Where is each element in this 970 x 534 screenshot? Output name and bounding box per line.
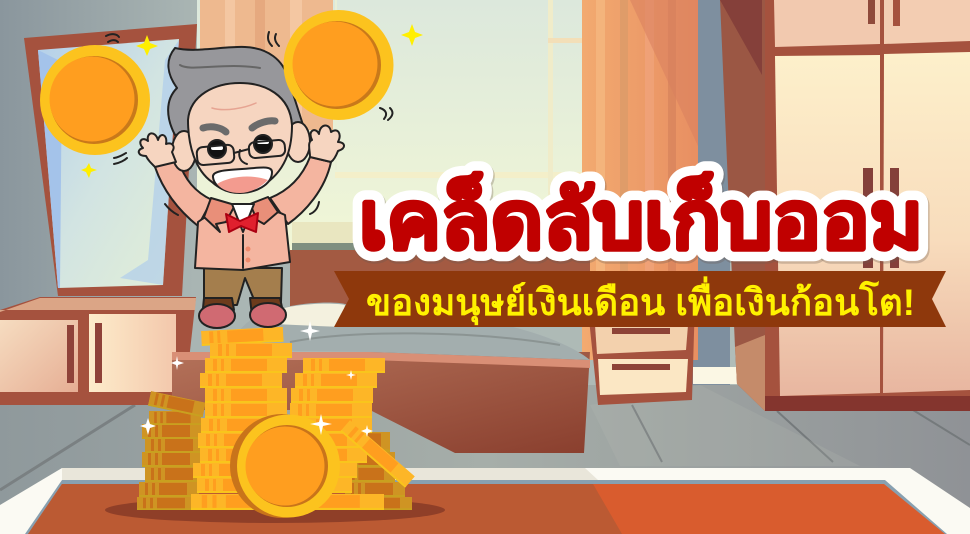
collar (204, 198, 235, 232)
glasses (196, 139, 286, 166)
tilted coin (340, 420, 415, 488)
bedside table (587, 300, 695, 405)
shadow under coins (105, 497, 445, 523)
right curtain (582, 0, 698, 360)
subtitle: ของมนุษย์เงินเดือน เพื่อเงินก้อนโต! (366, 276, 915, 326)
right stack (270, 358, 385, 510)
left hand (139, 133, 176, 167)
front big coin (230, 414, 340, 518)
bed (172, 303, 590, 453)
pants (204, 268, 282, 305)
white sparkles (140, 321, 373, 437)
window light on floor (693, 367, 737, 384)
floating coin right (284, 10, 394, 120)
jacket (195, 207, 290, 270)
main stack (191, 327, 301, 510)
window (197, 0, 585, 255)
rug (0, 468, 970, 534)
mouth (213, 168, 272, 193)
right hand (309, 125, 344, 162)
bed headboard (290, 250, 590, 310)
title: เคล็ดลับเก็บออม (360, 174, 924, 267)
dresser (0, 297, 196, 405)
left dark stack (137, 391, 206, 510)
eyes (208, 140, 226, 158)
man (139, 47, 344, 328)
left shoe (199, 304, 235, 328)
left curtain (200, 0, 333, 130)
mirror (24, 24, 197, 296)
bow tie (226, 213, 258, 232)
right dark stack (340, 432, 412, 510)
jacket buttons (246, 246, 250, 252)
left ear (172, 131, 196, 171)
yellow sparkles (81, 24, 423, 178)
coin stack (137, 327, 415, 510)
title: เคล็ดลับเก็บออม (359, 172, 923, 265)
floating coin left (40, 45, 150, 155)
wardrobe (720, 0, 970, 411)
right cuff (250, 298, 283, 316)
eyebrows (203, 127, 226, 132)
right shoe (250, 303, 286, 327)
title: เคล็ดลับเก็บออม (359, 172, 923, 265)
left arm (155, 160, 212, 226)
ribbon banner (334, 271, 946, 327)
right arm (270, 157, 331, 224)
motion marks (106, 32, 392, 215)
right ear (286, 122, 310, 162)
hair (168, 47, 303, 135)
left cuff (202, 298, 234, 318)
room background wall (0, 0, 970, 420)
face (188, 83, 292, 192)
floor light and plank lines (0, 385, 970, 490)
floor (0, 385, 970, 534)
